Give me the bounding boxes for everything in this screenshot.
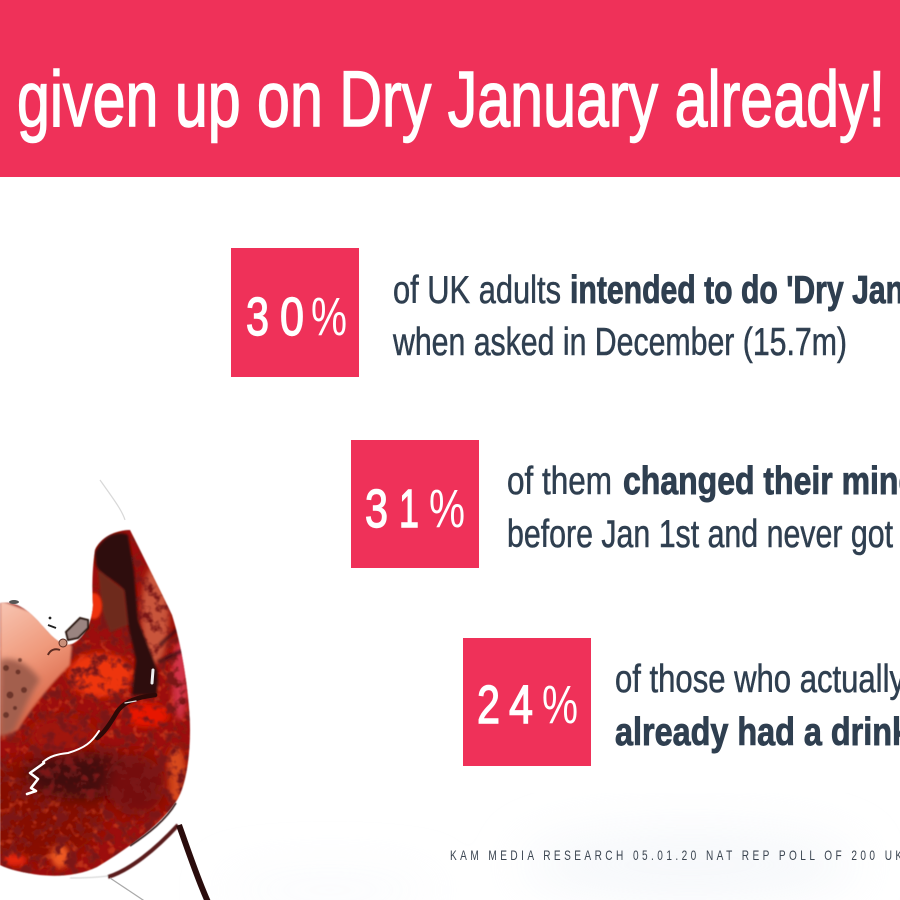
- dark wine shadow: [95, 533, 158, 695]
- stat badge 24%: 2: [477, 675, 500, 735]
- stat badge 30%: 3: [246, 287, 269, 347]
- stat badge 30%: %: [311, 287, 347, 347]
- pale wine surface: [0, 600, 72, 735]
- stat badge 24%: %: [542, 675, 578, 735]
- wine glass illustration: [0, 480, 208, 900]
- stat badge 31%: 3: [365, 479, 388, 539]
- stat text: of them: [507, 460, 612, 503]
- stat badge 30%: 0: [280, 287, 304, 347]
- source note: KAM MEDIA RESEARCH 05.01.20 NAT REP POLL OF 200 UK: [450, 847, 900, 863]
- wine bubbles at surface: [9, 600, 88, 655]
- bowl base: [70, 803, 178, 878]
- stat badge 30%: [231, 248, 359, 377]
- streak and highlights in wine: [27, 670, 155, 794]
- glass rim outline: [100, 480, 125, 520]
- stat badge 24%: [463, 638, 591, 766]
- wine in the bowl: [0, 520, 200, 880]
- stat row: 30%: [231, 248, 900, 377]
- stat row: 31%: [351, 440, 900, 568]
- stat badge 31%: %: [429, 479, 465, 539]
- stat row: 24%: [463, 638, 900, 766]
- stat text: [392, 269, 900, 364]
- stat text: [507, 460, 900, 556]
- stat text: of UK adults: [393, 269, 561, 312]
- stat badge 31%: 1: [399, 479, 419, 539]
- stat text: [615, 658, 900, 754]
- header banner: [0, 0, 900, 177]
- stem: [110, 825, 208, 900]
- stat badge 31%: [351, 440, 479, 568]
- stat badge 24%: 4: [509, 675, 533, 735]
